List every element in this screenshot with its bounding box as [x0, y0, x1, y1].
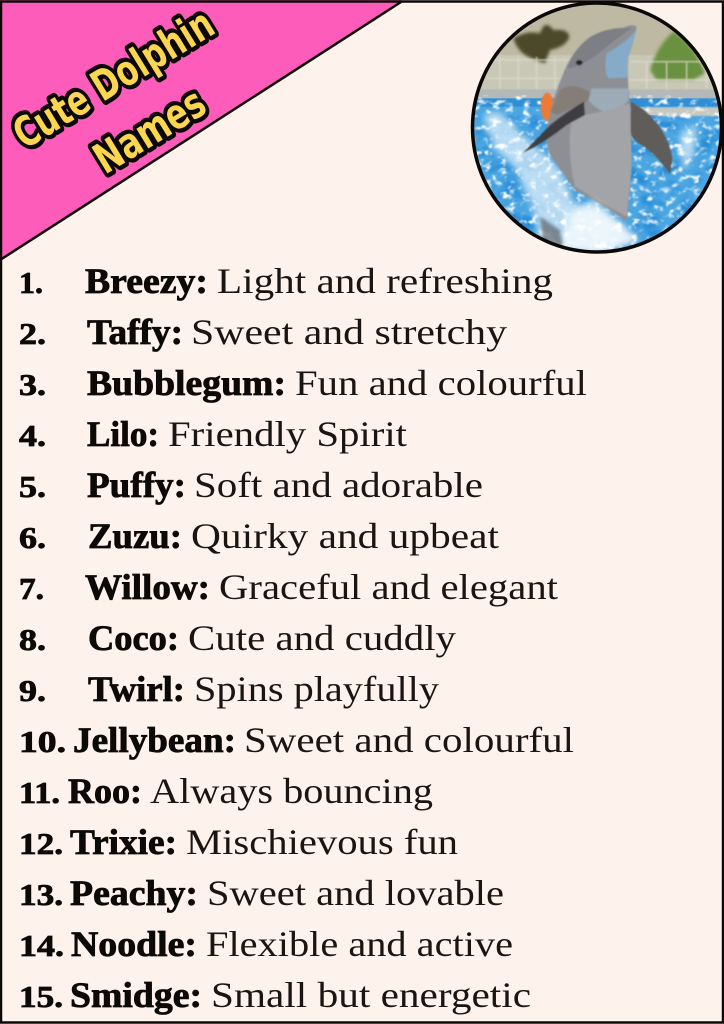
item 10: [19, 720, 574, 760]
item 11: [19, 771, 433, 811]
item 12: 12.: [19, 826, 63, 861]
item 6: Quirky and upbeat: [191, 516, 499, 556]
item 3: Fun and colourful: [295, 363, 587, 403]
item 2: Sweet and stretchy: [191, 312, 507, 352]
item 6: [19, 516, 499, 556]
dolphin body: [523, 25, 672, 222]
item 8: 8.: [19, 622, 46, 657]
water texture: [470, 115, 724, 255]
item 3: [19, 363, 587, 403]
item 2: 2.: [19, 316, 46, 351]
item 9: Spins playfully: [194, 669, 439, 709]
item 11: Roo:: [68, 771, 142, 811]
item 6: 6.: [19, 520, 46, 555]
item 13: Sweet and lovable: [207, 873, 504, 913]
names list: [19, 261, 587, 1015]
item 2: Taffy:: [87, 312, 183, 352]
item 2: [19, 312, 507, 352]
item 8: Coco:: [88, 618, 179, 658]
item 13: [19, 873, 504, 913]
item 15: [19, 975, 531, 1015]
item 14: Noodle:: [71, 924, 197, 964]
item 10: 10.: [19, 724, 66, 759]
item 4: [19, 414, 407, 454]
item 6: Zuzu:: [88, 516, 182, 556]
item 4: 4.: [19, 418, 46, 453]
item 11: 11.: [19, 775, 60, 810]
item 8: Cute and cuddly: [188, 618, 456, 658]
item 1: 1.: [19, 265, 43, 300]
item 10: Sweet and colourful: [244, 720, 574, 760]
item 8: [19, 618, 456, 658]
item 4: Friendly Spirit: [168, 414, 407, 454]
item 1: Light and refreshing: [217, 261, 553, 301]
item 1: [19, 261, 553, 301]
title: Names: [85, 78, 214, 183]
item 14: 14.: [19, 928, 64, 963]
item 14: Flexible and active: [206, 924, 513, 964]
item 9: [19, 669, 439, 709]
title: [4, 0, 223, 183]
item 1: Breezy:: [85, 261, 208, 301]
item 12: Trixie:: [70, 822, 177, 862]
item 14: [19, 924, 513, 964]
item 9: 9.: [19, 673, 46, 708]
item 3: 3.: [19, 367, 46, 402]
item 7: 7.: [19, 571, 44, 606]
item 15: Smidge:: [70, 975, 202, 1015]
photo: leaping dolphin in circular frame: [470, 0, 724, 255]
item 7: Willow:: [85, 567, 210, 607]
item 7: Graceful and elegant: [219, 567, 558, 607]
item 5: Puffy:: [87, 465, 186, 505]
item 10: Jellybean:: [73, 720, 236, 760]
item 15: 15.: [19, 979, 63, 1014]
item 7: [19, 567, 558, 607]
item 5: [19, 465, 483, 505]
item 13: 13.: [19, 877, 63, 912]
item 4: Lilo:: [87, 414, 159, 454]
item 11: Always bouncing: [150, 771, 433, 811]
item 5: 5.: [19, 469, 46, 504]
item 12: Mischievous fun: [186, 822, 458, 862]
item 9: Twirl:: [88, 669, 185, 709]
item 3: Bubblegum:: [87, 363, 286, 403]
pink corner banner: [0, 0, 402, 259]
item 5: Soft and adorable: [194, 465, 483, 505]
item 12: [19, 822, 458, 862]
item 13: Peachy:: [70, 873, 198, 913]
item 15: Small but energetic: [211, 975, 531, 1015]
